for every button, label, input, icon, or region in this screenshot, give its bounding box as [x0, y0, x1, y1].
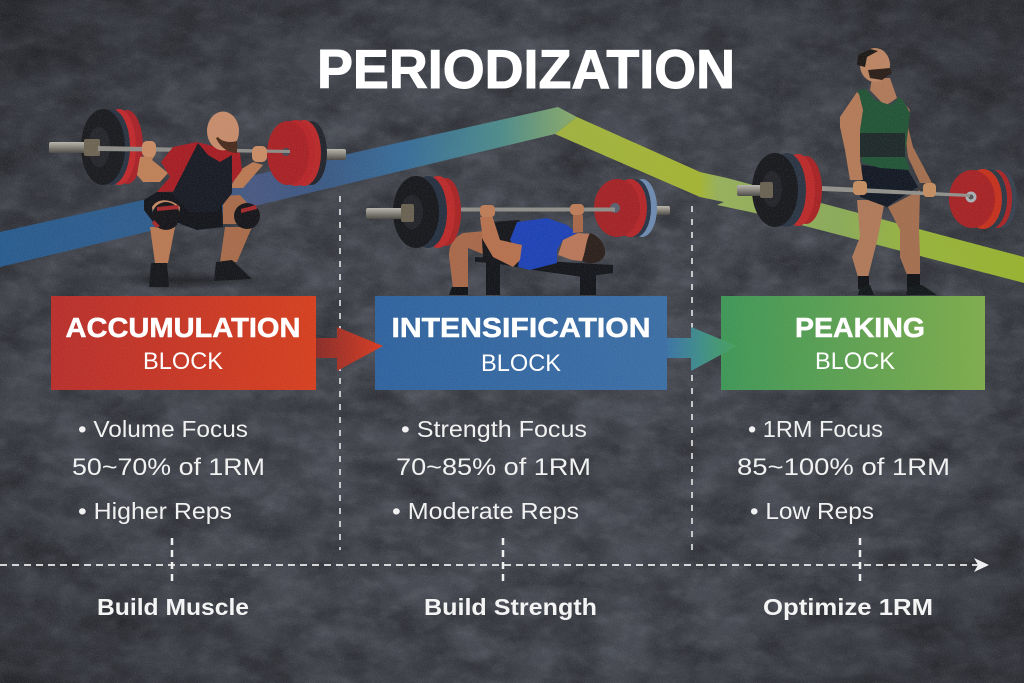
- arrow: accumulation to intensification: [316, 327, 383, 371]
- details: accumulation: [72, 416, 265, 524]
- knee sleeves: [152, 202, 180, 230]
- heading: intensification block: BLOCK: [481, 350, 561, 377]
- left plates: [790, 156, 822, 224]
- heading: intensification block: INTENSIFICATION: [392, 312, 650, 343]
- athlete: bench press: [366, 176, 670, 295]
- bar: [822, 186, 970, 197]
- left plates: [431, 178, 461, 246]
- details: intensification: [392, 416, 591, 524]
- details: accumulation: • Higher Reps: [78, 498, 232, 524]
- bar: [461, 208, 615, 212]
- arrow: intensification to peaking: [667, 327, 737, 371]
- shirt: [510, 218, 577, 270]
- details: peaking: 85~100% of 1RM: [737, 454, 950, 481]
- arms: [137, 155, 168, 182]
- tank top: [858, 89, 910, 170]
- details: accumulation: 50~70% of 1RM: [72, 454, 265, 481]
- goal label: build muscle: Build Muscle: [97, 594, 249, 620]
- shoes: [149, 263, 169, 287]
- right plates: [987, 170, 1017, 228]
- details: intensification: 70~85% of 1RM: [396, 454, 591, 481]
- timeline tick 2: [502, 538, 504, 586]
- timeline dashed arrow: [0, 558, 989, 572]
- belt: [860, 133, 905, 157]
- heading: accumulation block: [66, 312, 300, 375]
- thighs: [152, 200, 180, 224]
- arms: [840, 92, 867, 180]
- goal label: build strength: Build Strength: [424, 594, 597, 620]
- shorts: [144, 192, 232, 230]
- right plates: [325, 149, 346, 160]
- progression ribbon: rising blue segment: [0, 107, 577, 267]
- details: peaking: • Low Reps: [750, 498, 874, 524]
- bar: [98, 146, 290, 153]
- left plates: [111, 110, 143, 184]
- title: PERIODIZATION: [317, 38, 735, 100]
- hands: [480, 205, 495, 217]
- head: [207, 112, 239, 150]
- details: intensification: • Strength Focus: [401, 416, 587, 442]
- dashed vertical divider 1: [339, 196, 341, 550]
- arms: [480, 215, 522, 267]
- shins: [150, 227, 175, 263]
- hands: [142, 141, 156, 157]
- timeline tick 1: [171, 538, 173, 586]
- timeline tick 3: [859, 538, 861, 586]
- neck and head: [870, 78, 897, 106]
- goal label: optimize 1RM: Optimize 1RM: [763, 594, 933, 620]
- bench: [475, 257, 613, 277]
- heading: intensification block: [392, 312, 650, 377]
- singlet: [172, 143, 232, 212]
- heading: accumulation block: BLOCK: [143, 348, 223, 375]
- heading: peaking block: BLOCK: [815, 348, 895, 375]
- hands: [853, 181, 867, 195]
- leg: [449, 231, 485, 288]
- right plates: [655, 206, 670, 215]
- shorts: [482, 220, 520, 258]
- heading: peaking block: PEAKING: [795, 312, 925, 343]
- shorts: [860, 165, 918, 207]
- details: peaking: • 1RM Focus: [748, 416, 883, 442]
- head and hair: [558, 233, 592, 262]
- heading: peaking block: [795, 312, 925, 375]
- progression ribbon: falling green segment: [555, 117, 1024, 283]
- details: accumulation: • Volume Focus: [78, 416, 248, 442]
- athlete: squat with barbell: [49, 109, 346, 289]
- dashed vertical divider 2: [691, 206, 693, 550]
- torso red shirt: [157, 142, 242, 192]
- block: accumulation: [51, 296, 316, 390]
- block: intensification: [375, 296, 667, 390]
- heading: accumulation block: ACCUMULATION: [66, 312, 300, 343]
- socks and shoes: [858, 276, 869, 289]
- details: peaking: [737, 416, 950, 524]
- block: peaking: [721, 296, 985, 390]
- athlete: deadlift lockout: [737, 48, 1017, 299]
- details: intensification: • Moderate Reps: [392, 498, 579, 524]
- legs: [852, 200, 885, 277]
